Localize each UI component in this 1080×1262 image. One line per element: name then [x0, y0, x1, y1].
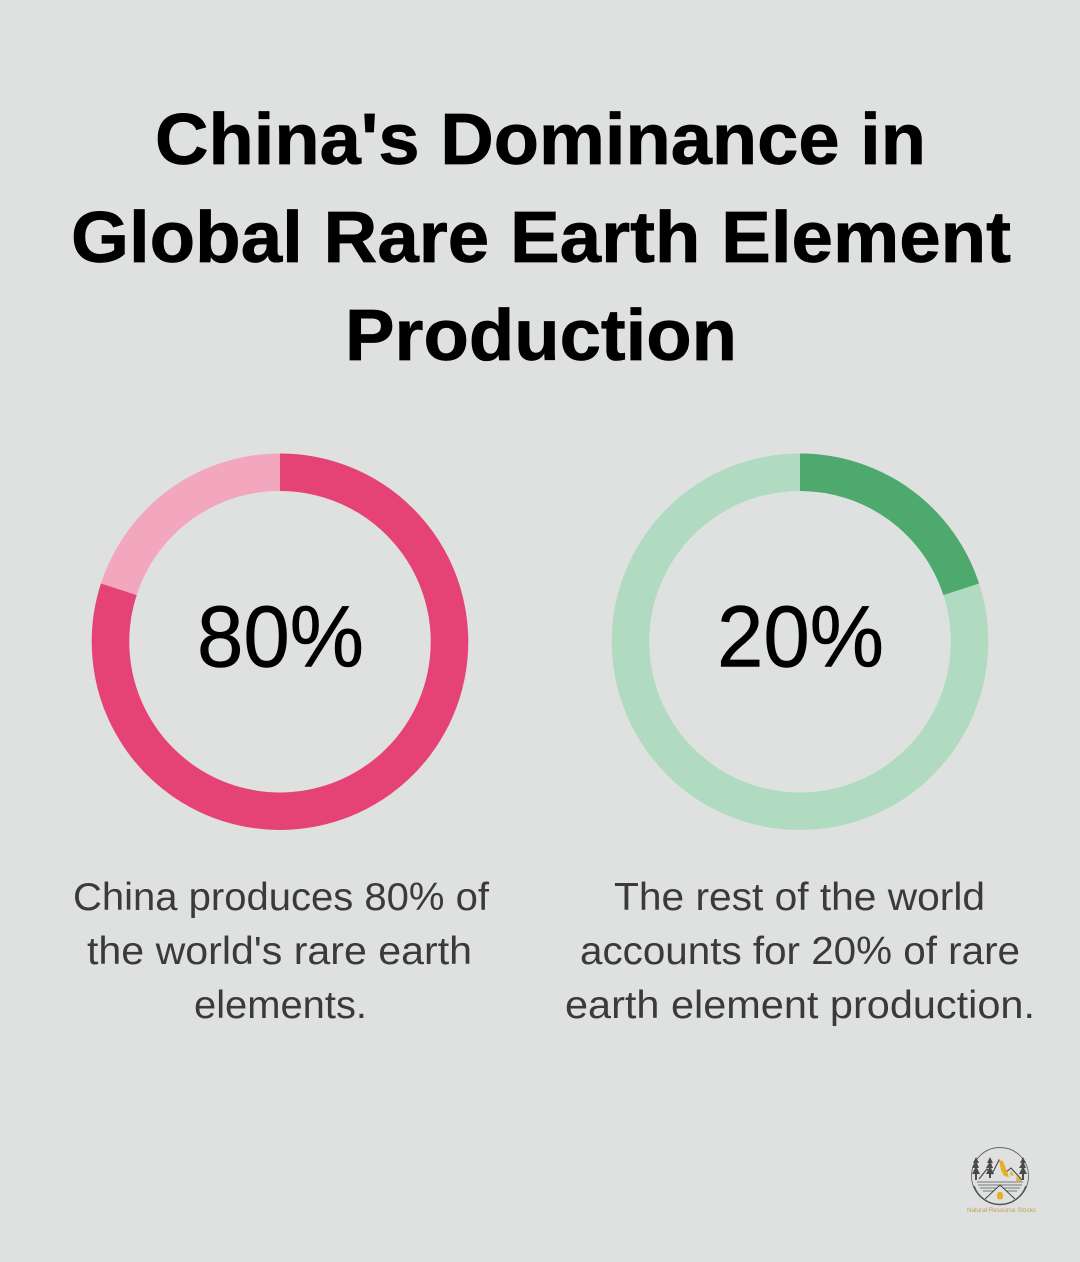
description: rest of world: accounts for 20% of rare: [580, 930, 1020, 973]
description: China: China produces 80% of: [73, 876, 489, 919]
description: China: the world's rare earth: [87, 930, 472, 973]
description: rest of world: The rest of the world: [614, 876, 985, 919]
donut chart: 80 percent: [110, 472, 449, 811]
description: China: elements.: [194, 984, 367, 1027]
description: rest of world: earth element production.: [565, 984, 1035, 1027]
description: China: [73, 876, 489, 1027]
title: China's Dominance in: [155, 100, 926, 180]
panel: China share: [73, 472, 489, 1027]
donut chart: 20 percent: [630, 472, 970, 811]
logo caption: Natural Resource Stocks: [967, 1207, 1037, 1214]
icon: tent: [985, 1185, 1015, 1199]
icon: mountains: [979, 1160, 1022, 1180]
logo ring: [972, 1148, 1028, 1204]
logo: Natural Resource Stocks: [967, 1148, 1037, 1214]
icon: trees: [972, 1157, 1027, 1180]
panel: rest of world share: [565, 472, 1035, 1027]
title: Global Rare Earth Element: [71, 198, 1011, 278]
water lines: [977, 1182, 1023, 1191]
title: [71, 100, 1011, 376]
stat: 20%: 20%: [717, 588, 884, 686]
title: Production: [345, 296, 737, 376]
stat: 80%: 80%: [197, 588, 364, 686]
description: rest of world: [565, 876, 1035, 1027]
